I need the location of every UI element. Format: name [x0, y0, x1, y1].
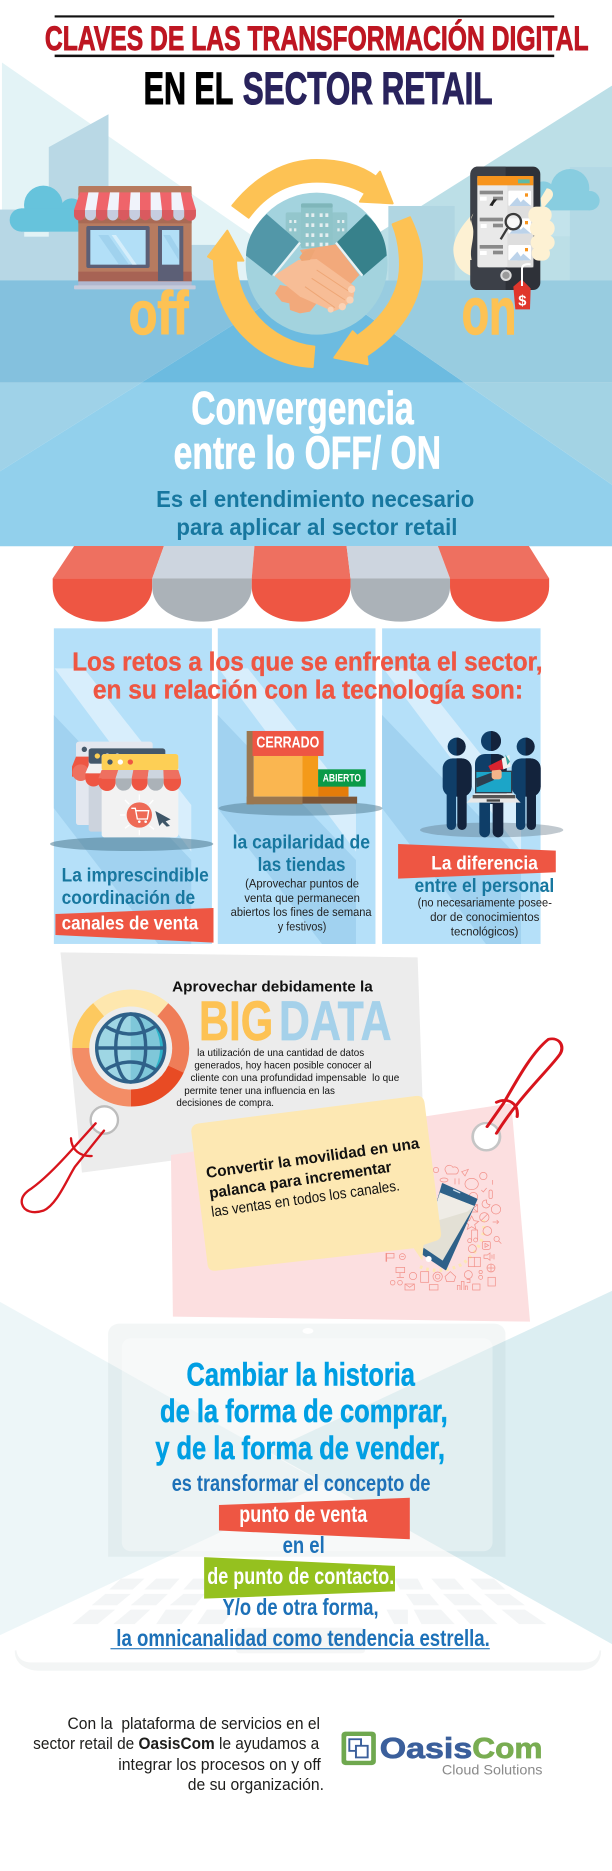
heading: convergencia	[174, 383, 441, 479]
panel: challenge cards background	[54, 628, 541, 944]
awning	[53, 546, 549, 622]
icon: store	[74, 186, 196, 289]
text: footer message: Con la plataforma de servicios en el	[68, 1714, 320, 1733]
text: coordinación de canales de venta: canales de venta	[62, 913, 199, 934]
text: coordinación de canales de venta: coordinación de	[62, 887, 195, 909]
logo: OasisCom: Oasis	[380, 1733, 472, 1765]
heading: cambiar la historia: Cambiar la historia	[187, 1358, 415, 1393]
logo: OasisCom: Com	[472, 1733, 543, 1765]
text: aprovechar big data: permite tener una influencia en las	[184, 1086, 335, 1097]
text: aprovechar big data: decisiones de compra.	[176, 1098, 274, 1109]
text: diferencia entre el personal: (no necesariamente posee-	[418, 897, 552, 909]
off and on labels: on	[462, 274, 516, 348]
text: entendimiento necesario: Es el entendimiento necesario	[156, 487, 474, 513]
text: entendimiento necesario: para aplicar al sector retail	[176, 515, 457, 541]
text: transformar el concepto: de punto de contacto.	[207, 1564, 394, 1590]
text: diferencia entre el personal	[398, 844, 556, 938]
text: coordinación de canales de venta	[55, 865, 213, 943]
icon: smartphone with hand	[453, 167, 555, 310]
text: aprovechar big data: DATA	[279, 989, 391, 1052]
text: capilaridad de las tiendas: la capilaridad de	[233, 832, 370, 853]
text: capilaridad de las tiendas	[231, 832, 372, 933]
text: movilidad: las ventas en todos los canales.	[210, 1177, 401, 1221]
text: transformar el concepto: Y/o de otra forma,	[222, 1595, 379, 1621]
text: diferencia entre el personal: dor de conocimientos	[430, 911, 539, 924]
icon: donut with globe	[81, 998, 181, 1098]
panel: mobile tag	[171, 1096, 530, 1322]
text: transformar el concepto: punto de venta	[239, 1502, 368, 1528]
text: footer message: integrar los procesos on y off	[118, 1754, 321, 1774]
icon: circular arrows	[208, 160, 422, 367]
text: diferencia entre el personal: La diferencia	[431, 853, 538, 874]
icon: team with laptop	[420, 731, 563, 837]
text: transformar el concepto: es transformar el concepto de	[172, 1471, 431, 1497]
icon: smartphone with hand: $	[518, 294, 526, 310]
text: coordinación de canales de venta: La imprescindible	[62, 865, 209, 886]
text: aprovechar big data	[172, 980, 399, 1109]
icon: right tag ring and string	[473, 1039, 562, 1150]
heading: cambiar la historia: de la forma de comprar,	[160, 1394, 448, 1430]
panel: big data tag	[60, 952, 423, 1173]
icon: online shop windows	[50, 742, 213, 851]
text: footer message: sector retail de OasisCom le ayudamos a	[33, 1734, 320, 1753]
heading: los retos	[72, 647, 543, 704]
text: aprovechar big data: BIG	[199, 989, 273, 1052]
text: aprovechar big data: la utilización de una cantidad de datos	[197, 1048, 364, 1059]
heading: convergencia: entre lo OFF/ ON	[174, 427, 441, 479]
icon: closed and open store: CERRADO	[256, 734, 319, 751]
icon: closed and open store	[219, 731, 382, 816]
text: aprovechar big data: generados, hoy hacen posible conocer al	[194, 1060, 372, 1071]
heading: cambiar la historia	[155, 1358, 448, 1467]
off and on labels: off	[129, 279, 189, 347]
text: transformar el concepto: en el	[283, 1533, 325, 1559]
text: aprovechar big data: cliente con una profundidad impensable lo que	[190, 1073, 399, 1084]
yellow note	[191, 1096, 441, 1271]
text: capilaridad de las tiendas: venta que permanecen	[244, 891, 360, 905]
text: movilidad: palanca para incrementar	[208, 1159, 393, 1202]
icon: left tag ring and string	[22, 1106, 118, 1212]
text: diferencia entre el personal: entre el personal	[414, 875, 554, 897]
text: entendimiento necesario	[156, 487, 474, 541]
icon: right cloud	[531, 169, 600, 210]
logo: OasisCom: Cloud Solutions	[442, 1763, 543, 1778]
off and on labels	[129, 274, 516, 348]
heading: convergencia: Convergencia	[191, 383, 414, 435]
icon: left cloud	[10, 186, 83, 232]
text: capilaridad de las tiendas: las tiendas	[258, 854, 345, 876]
icon: closed and open store: ABIERTO	[323, 772, 361, 784]
text: capilaridad de las tiendas: abiertos los fines de semana	[231, 905, 372, 919]
panel: laptop background	[0, 1291, 612, 1671]
text: diferencia entre el personal: tecnológicos)	[451, 926, 518, 938]
text: footer message	[33, 1714, 324, 1794]
text: movilidad	[205, 1135, 421, 1221]
title	[45, 15, 589, 115]
icon: handshake circle	[246, 193, 388, 335]
text: capilaridad de las tiendas: (Aprovechar puntos de	[245, 877, 359, 890]
text: aprovechar big data: Aprovechar debidamente la	[172, 980, 373, 995]
heading: los retos: en su relación con la tecnología son:	[93, 674, 523, 704]
text: footer message: de su organización.	[188, 1774, 324, 1794]
heading: cambiar la historia: y de la forma de vender,	[155, 1431, 445, 1467]
icon: phone with app icons	[386, 1165, 501, 1290]
text: capilaridad de las tiendas: y festivos)	[278, 920, 326, 933]
text: transformar el concepto: la omnicanalidad como tendencia estrella.	[116, 1626, 490, 1652]
panel: hero background	[0, 62, 612, 546]
text: movilidad: Convertir la movilidad en una	[205, 1135, 421, 1182]
title: EN EL	[144, 64, 233, 115]
text: transformar el concepto	[110, 1471, 490, 1652]
logo: OasisCom	[342, 1732, 543, 1778]
